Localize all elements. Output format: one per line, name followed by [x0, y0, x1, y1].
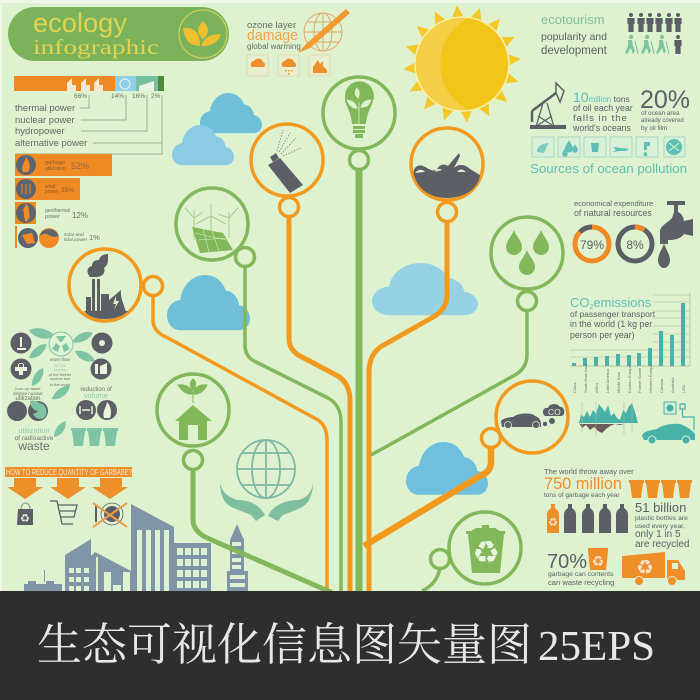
garbage statistics: used every year, — [635, 523, 685, 530]
small labels: nuclear fuel — [50, 376, 70, 381]
title pill: infographic — [33, 35, 159, 59]
oil statistics — [530, 83, 690, 133]
area chart — [579, 402, 638, 435]
small labels: of radioactive — [15, 435, 54, 442]
globe in hands icon — [220, 440, 313, 521]
CO2 emissions heading: of passenger transport — [570, 309, 656, 319]
icon: tap and drop — [658, 201, 693, 268]
small labels: utilization — [15, 396, 41, 402]
cloud centre right — [372, 263, 478, 315]
node: recycle bin: ♻ — [472, 535, 500, 571]
garbage statistics — [544, 467, 692, 587]
CO2 emissions heading: emissions — [593, 295, 652, 310]
node: recycle bin — [430, 512, 521, 584]
CO2 bar chart: Middle East — [616, 371, 621, 393]
bar: garbage utilization — [15, 154, 112, 176]
icon: recycling truck: ♻ — [636, 555, 654, 579]
bar: wind power: wind — [45, 184, 56, 190]
garbage statistics: 70% — [547, 551, 587, 573]
garbage statistics: garbage can contents — [548, 571, 614, 578]
natural resources expenditure — [574, 199, 693, 268]
CO2 bar chart: Canada — [659, 378, 664, 393]
small labels: burn-up waste — [15, 386, 41, 391]
bar: garbage utilization: utilization — [45, 166, 66, 172]
small labels: volume — [84, 391, 108, 400]
oil statistics: already covered — [641, 118, 684, 124]
ecotourism: ecotourism — [541, 12, 605, 27]
node: ocean oil — [411, 128, 483, 222]
oil statistics: of ocean area — [641, 110, 680, 117]
electric car — [642, 402, 695, 444]
CO2 bar chart: Australia — [670, 377, 675, 393]
icon: shopping cart — [50, 501, 77, 524]
title pill: ecology — [33, 8, 127, 38]
CO2 emissions heading: CO — [570, 295, 590, 310]
small labels: utilization — [18, 426, 50, 435]
bar: wind power — [15, 178, 80, 200]
city skyline — [24, 504, 248, 591]
CO2 bar chart: Latin America — [605, 368, 610, 393]
how to reduce garbage: HOW TO REDUCE QUANTITY OF GARBABE? — [6, 468, 133, 477]
icon: crossed globe and tool — [93, 503, 127, 527]
sun — [403, 5, 521, 123]
small labels — [13, 357, 112, 453]
node: car with CO — [482, 381, 568, 453]
CO2 bar chart: USA — [681, 384, 686, 393]
ecotourism: popularity and — [541, 31, 607, 43]
node: spray can — [251, 124, 323, 216]
icon: leaves badge — [179, 10, 227, 58]
garbage statistics: can waste recycling — [548, 578, 614, 587]
bar: solar and tidal power: 1% — [89, 233, 100, 242]
bar: solar and tidal power — [15, 226, 100, 248]
CO2 emissions heading: person per year) — [570, 330, 635, 340]
CO2 bar chart: Western Europe — [648, 363, 653, 393]
energy share bar: 2% — [151, 93, 161, 100]
icons: weather boxes — [247, 55, 330, 76]
dark icon circles — [7, 332, 117, 421]
ozone layer damage: ozone layer — [247, 20, 296, 31]
energy share bar — [14, 76, 164, 100]
icon: radiation symbol — [49, 332, 73, 356]
energy legend with leader lines: thermal power — [15, 103, 75, 114]
node: light bulb — [323, 77, 395, 170]
node: green house — [157, 374, 229, 470]
bar: garbage utilization: garbage — [45, 160, 65, 166]
chart: ring 8%: 8% — [626, 238, 644, 252]
cloud lower right — [406, 442, 488, 495]
cloud lower left — [167, 275, 250, 330]
footer title: 生态可视化信息图矢量图 — [37, 620, 532, 670]
energy share bar: 66% — [74, 93, 87, 100]
bar: wind power: power — [45, 189, 59, 195]
node: factory — [69, 249, 162, 321]
node: wind and solar — [176, 188, 254, 266]
radioactive waste cycle — [7, 324, 118, 453]
oil statistics: of oil each year — [573, 103, 633, 113]
icon: orange bin with recycle mark: ♻ — [592, 554, 604, 570]
energy share bar: 16% — [132, 93, 145, 100]
CO2 bar chart: Former Soviet — [637, 367, 642, 393]
node: car with CO: CO — [548, 407, 561, 417]
bar: geothermal power: power — [45, 214, 60, 220]
CO2 emissions heading: 2 — [590, 304, 594, 311]
garbage statistics: The world throw away over — [544, 467, 634, 476]
small labels: waste — [17, 439, 50, 453]
heading: sources of ocean pollution: Sources of ocean pollution — [530, 162, 687, 176]
icon: shopping bag: ♻ — [20, 512, 30, 525]
small labels: degree nuclear — [13, 391, 44, 396]
CO2 emissions heading: in the world (1 kg per — [570, 319, 652, 329]
CO2 emissions heading — [570, 295, 656, 340]
icon: hikers row — [625, 35, 669, 54]
energy legend with leader lines — [15, 95, 162, 154]
small labels: reduction of — [80, 387, 112, 393]
icon: teal recycle bins — [71, 428, 118, 446]
footer title: 25EPS — [538, 624, 655, 670]
oil statistics: 10million tons — [573, 89, 630, 105]
small labels: of the further — [49, 372, 72, 377]
energy legend with leader lines: alternative power — [15, 138, 87, 149]
garbage statistics: tons of garbage each year — [544, 492, 620, 499]
garbage statistics: plastic bottles are — [635, 515, 688, 522]
bar: geothermal power: geothermal — [45, 208, 70, 214]
bar: geothermal power — [15, 202, 88, 224]
icon: globe and pencil — [298, 9, 350, 53]
oil statistics: by oil film — [641, 125, 667, 132]
natural resources expenditure: economical expenditure — [574, 199, 653, 208]
CO2 bar chart: Africa — [594, 382, 599, 393]
natural resources expenditure: of natural resources — [574, 208, 652, 218]
how to reduce garbage — [5, 467, 133, 527]
ozone layer damage: damage — [247, 28, 298, 44]
icon: orange bin with recycle mark — [588, 548, 608, 570]
bar: wind power: 35% — [61, 187, 74, 194]
oil statistics: falls in the — [573, 113, 628, 124]
garbage statistics: 51 billion — [635, 500, 686, 515]
icon: recycling truck — [622, 552, 685, 586]
title pill — [8, 7, 229, 61]
bar: solar and tidal power: tidal power — [64, 237, 88, 243]
bar: garbage utilization: 52% — [71, 161, 89, 171]
ecotourism — [541, 12, 682, 57]
garbage statistics: 750 million — [544, 474, 622, 493]
CO2 bar chart — [570, 293, 690, 393]
node: water drops — [491, 217, 563, 310]
cloud group upper left — [172, 93, 262, 165]
ozone layer damage: global warming — [247, 42, 301, 51]
oil statistics: world's oceans — [572, 123, 632, 133]
ecotourism: development — [541, 45, 608, 57]
tree branch lines — [153, 168, 527, 594]
icon: bottles: ♻ — [548, 516, 558, 529]
garbage statistics: are recycled — [635, 539, 689, 550]
icon: oil pump — [530, 83, 566, 127]
energy legend with leader lines: nuclear power — [15, 115, 75, 126]
icon: bottles — [547, 504, 628, 533]
leaves — [26, 324, 96, 439]
arrows — [7, 478, 128, 499]
footer band — [0, 591, 700, 700]
chart: ring 79%: 79% — [580, 238, 604, 252]
energy share bar: 14% — [111, 93, 124, 100]
CO2 bar chart: South-East Asia — [583, 364, 588, 393]
energy legend with leader lines: hydropower — [15, 126, 65, 137]
ozone layer damage — [247, 9, 350, 76]
garbage statistics: only 1 in 5 — [635, 529, 681, 540]
oil statistics: 20% — [640, 86, 690, 114]
bar: geothermal power: 12% — [72, 211, 88, 220]
small labels: tonnes — [54, 367, 66, 372]
bar: solar and tidal power: solar and — [64, 232, 84, 238]
CO2 bar chart: Eastern Europe — [627, 364, 632, 393]
ocean pollution icons — [532, 137, 685, 157]
small labels: in the world — [50, 382, 70, 387]
small labels: 20 000 — [54, 363, 67, 368]
CO2 bar chart: China — [572, 382, 577, 393]
icon: orange bins — [629, 480, 692, 498]
icon: people row — [627, 13, 682, 54]
small labels: more than — [50, 357, 71, 362]
